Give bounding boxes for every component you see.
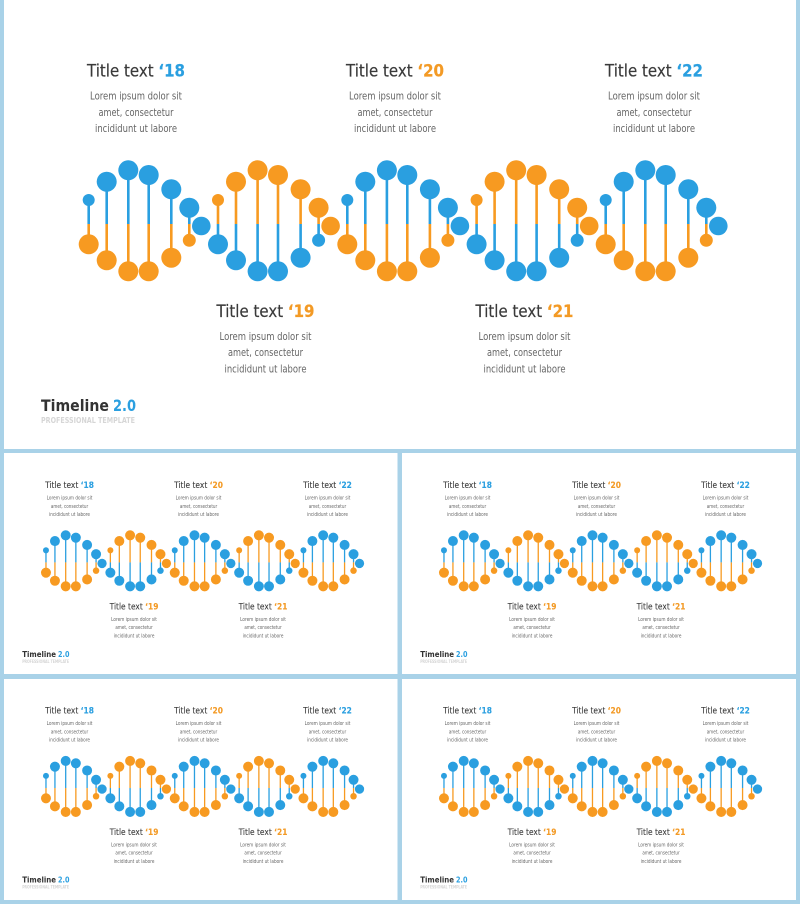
panel: small slide top left (4, 453, 398, 674)
panel: main slide (4, 0, 796, 449)
slide content: helix and labels (420, 706, 762, 890)
slide content: helix and labels (22, 481, 364, 664)
slide content: helix and labels (420, 481, 762, 664)
milestone titles, descriptions and brand block (41, 62, 703, 425)
panel: small slide bottom left (4, 679, 398, 900)
slide content: helix and labels (22, 706, 364, 890)
panel: small slide bottom right (402, 679, 796, 900)
DNA helix timeline (79, 160, 728, 281)
panel: small slide top right (402, 453, 796, 674)
